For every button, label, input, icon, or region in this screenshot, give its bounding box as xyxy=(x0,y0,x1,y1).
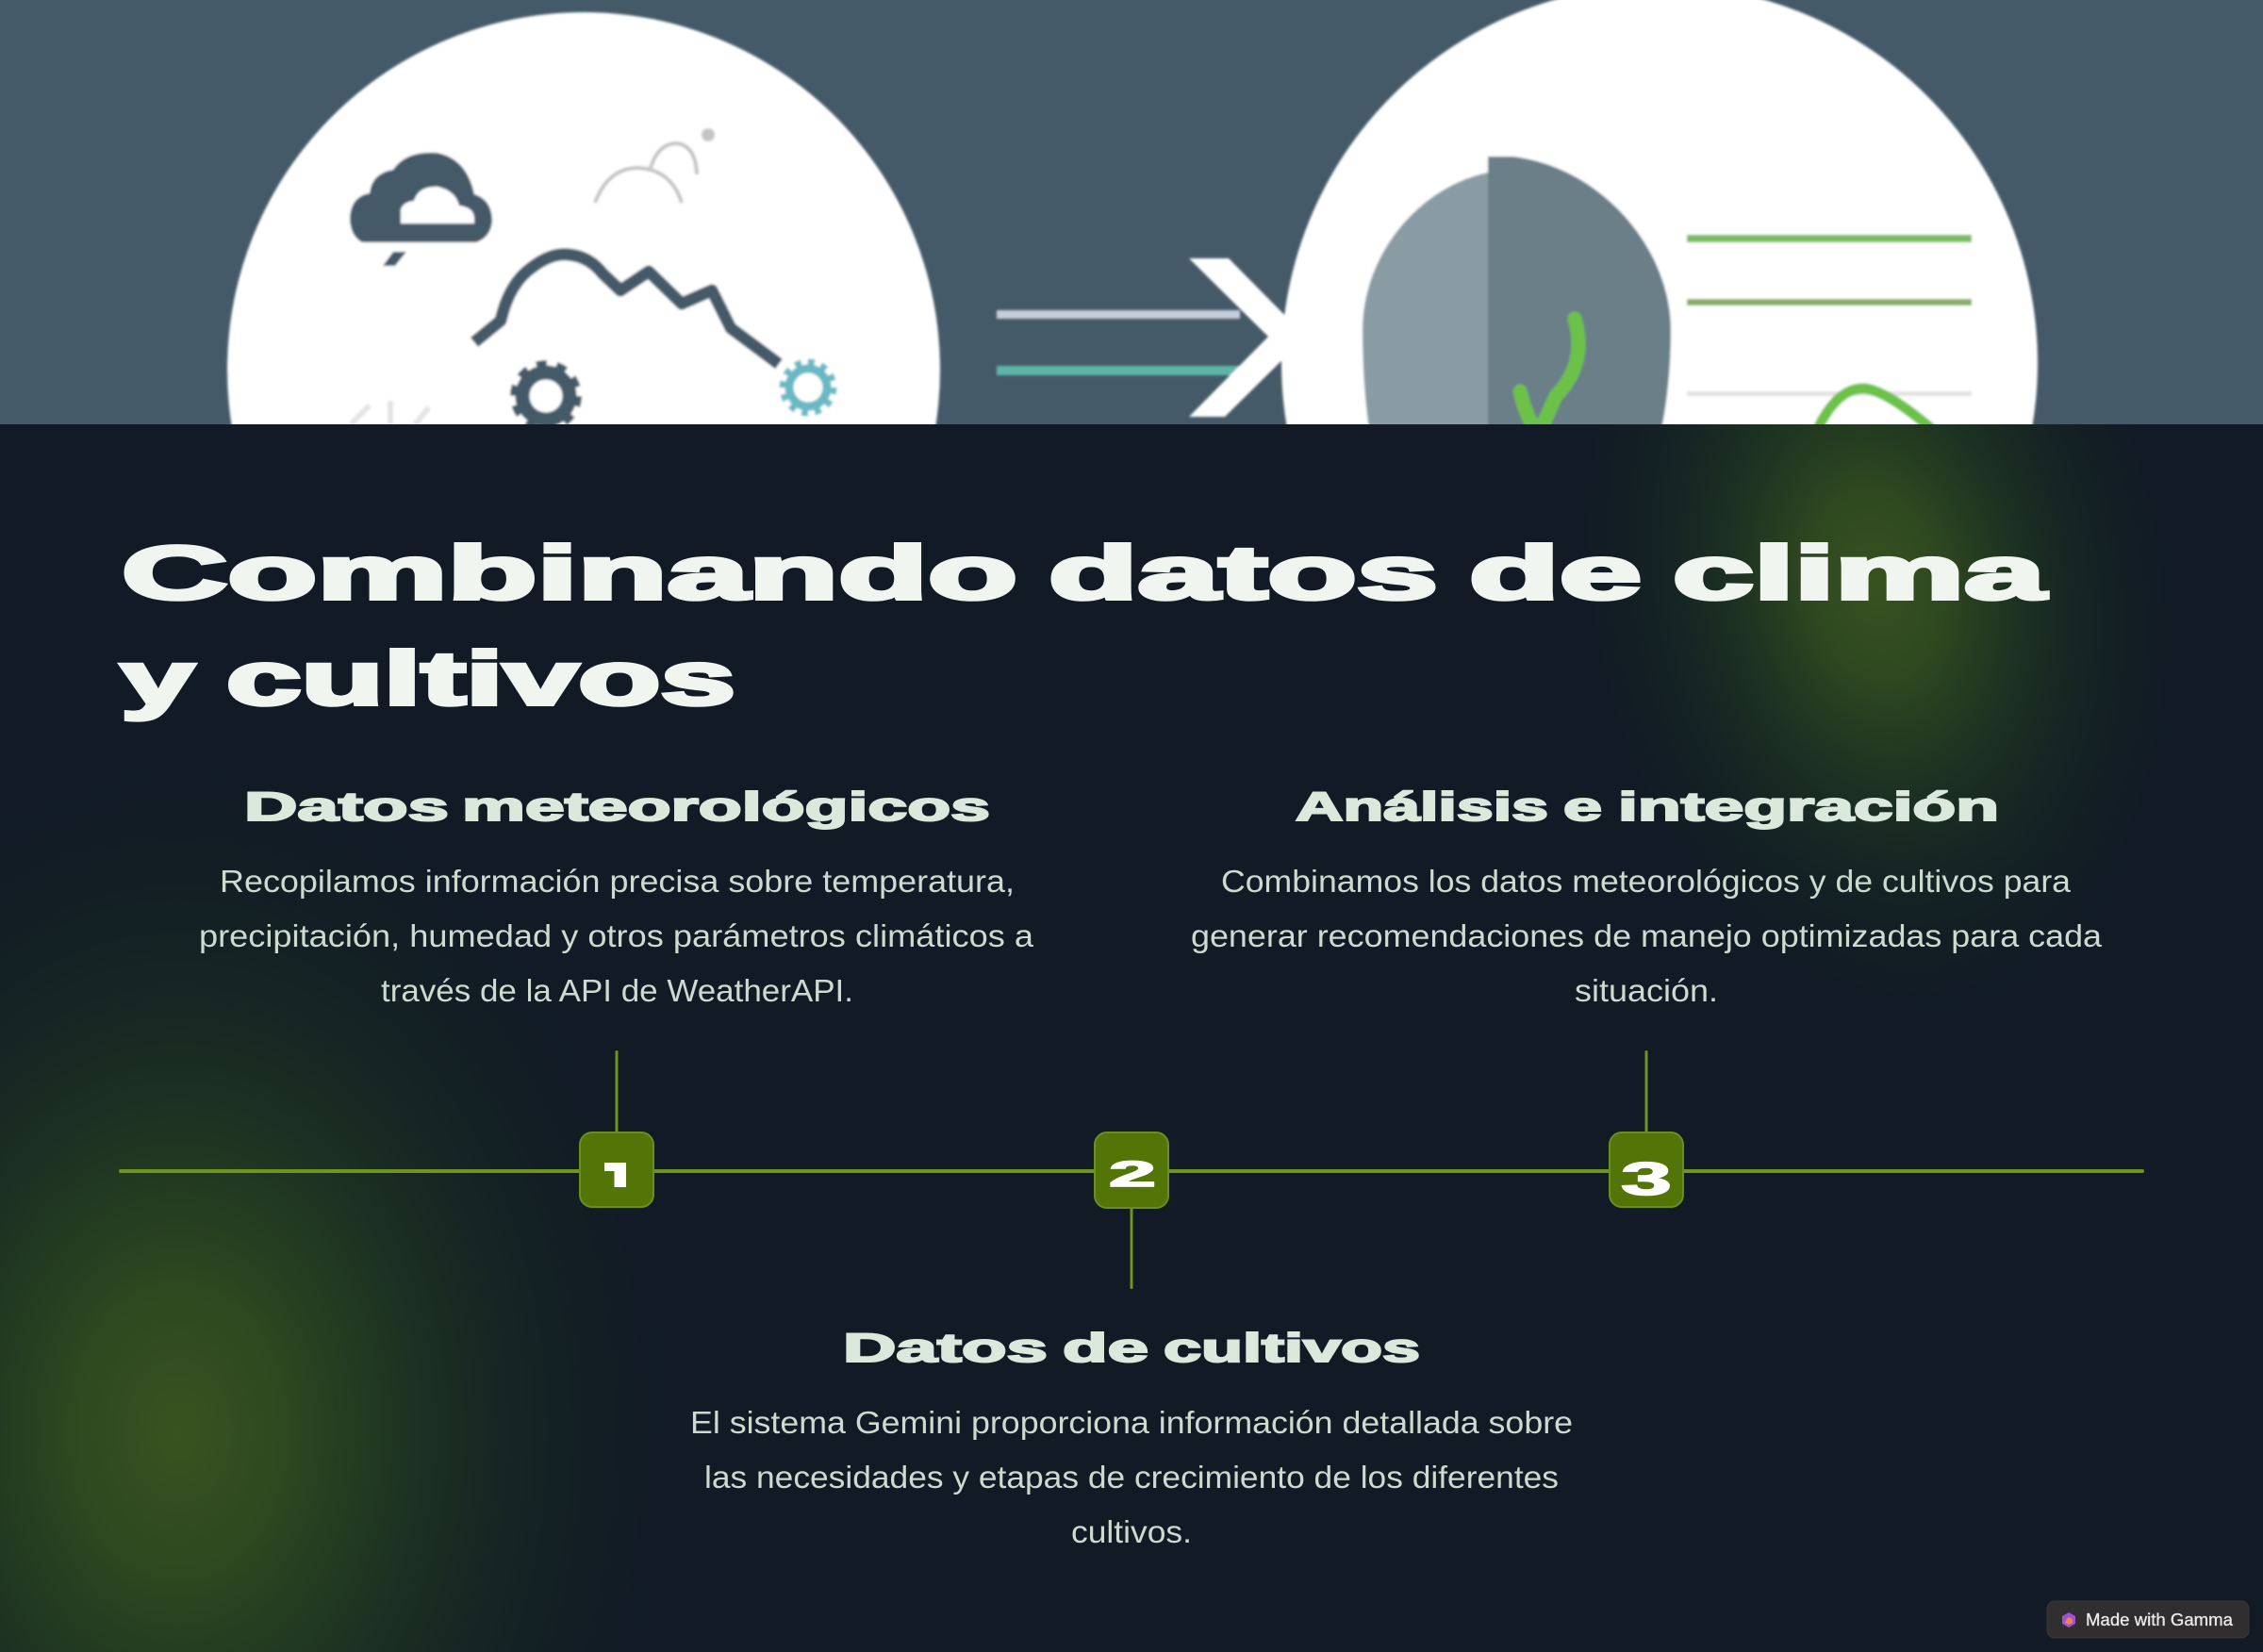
title: datos xyxy=(1049,531,1438,615)
list: result lines xyxy=(1687,235,1972,396)
title: de xyxy=(1469,531,1642,615)
icon: faint hills xyxy=(595,130,713,203)
icon: cloud xyxy=(350,153,492,266)
illustration: analysis circle xyxy=(1280,0,2040,424)
text block: datos meteorológicos: Recopilamos información precisa sobre temperatura, xyxy=(220,864,1015,899)
icon: head left half xyxy=(1363,173,1488,448)
text block: análisis e integración xyxy=(1191,785,2103,1008)
step badge 2 xyxy=(1095,1132,1168,1208)
text block: datos meteorológicos: través de la API de WeatherAPI. xyxy=(381,973,853,1008)
text block: datos de cultivos: Datos xyxy=(843,1326,1048,1371)
text block: datos de cultivos: cultivos xyxy=(1164,1326,1420,1371)
illustration: weather circle xyxy=(225,10,942,424)
text block: análisis e integración: e xyxy=(1563,785,1602,830)
chart: mountain line xyxy=(474,255,779,364)
text block: análisis e integración: generar recomendaciones de manejo optimizadas para cada xyxy=(1191,918,2103,953)
icon: teal gear xyxy=(783,362,834,413)
text block: análisis e integración: situación. xyxy=(1575,973,1718,1008)
text block: datos de cultivos xyxy=(690,1326,1573,1549)
arrow: data flow xyxy=(997,258,1306,417)
text block: datos de cultivos: El sistema Gemini proporciona información detallada sobre xyxy=(690,1405,1573,1440)
text block: datos meteorológicos: meteorológicos xyxy=(462,785,990,830)
text block: análisis e integración: integración xyxy=(1618,785,1999,830)
step badge 3 xyxy=(1610,1132,1683,1207)
timeline xyxy=(119,1050,2144,1289)
chart: green curve xyxy=(1812,381,1937,424)
panel: illustration band xyxy=(0,0,2263,424)
step badge 1 xyxy=(580,1132,653,1207)
title: clima xyxy=(1673,531,2046,615)
icon: check mark xyxy=(1520,319,1578,434)
text block: datos de cultivos: cultivos. xyxy=(1071,1514,1192,1549)
title: y xyxy=(121,636,195,720)
text block: análisis e integración: Combinamos los datos meteorológicos y de cultivos para xyxy=(1221,864,2072,899)
text block: datos meteorológicos: Datos xyxy=(244,785,449,830)
icon: faint plant xyxy=(351,401,429,424)
step badge 3: 3 xyxy=(1621,1154,1672,1205)
icon: head right half xyxy=(1488,157,1671,448)
panel: dark background xyxy=(0,424,2263,1652)
text block: datos de cultivos: las necesidades y etapas de crecimiento de los diferentes xyxy=(704,1460,1559,1495)
badge: made with gamma xyxy=(2047,1601,2249,1638)
text block: datos meteorológicos: precipitación, humedad y otros parámetros climáticos a xyxy=(199,918,1034,953)
step badge 1: 1 xyxy=(604,1156,626,1196)
title: Combinando xyxy=(122,531,1017,615)
step badge 2: 2 xyxy=(1109,1155,1156,1195)
text block: análisis e integración: Análisis xyxy=(1296,785,1548,830)
text block: datos de cultivos: de xyxy=(1063,1326,1148,1371)
title xyxy=(121,531,2046,720)
icon: dark gear xyxy=(514,364,578,428)
text block: datos meteorológicos xyxy=(199,785,1034,1008)
title: cultivos xyxy=(226,636,735,720)
badge: made with gamma: Made with Gamma xyxy=(2086,1611,2234,1629)
